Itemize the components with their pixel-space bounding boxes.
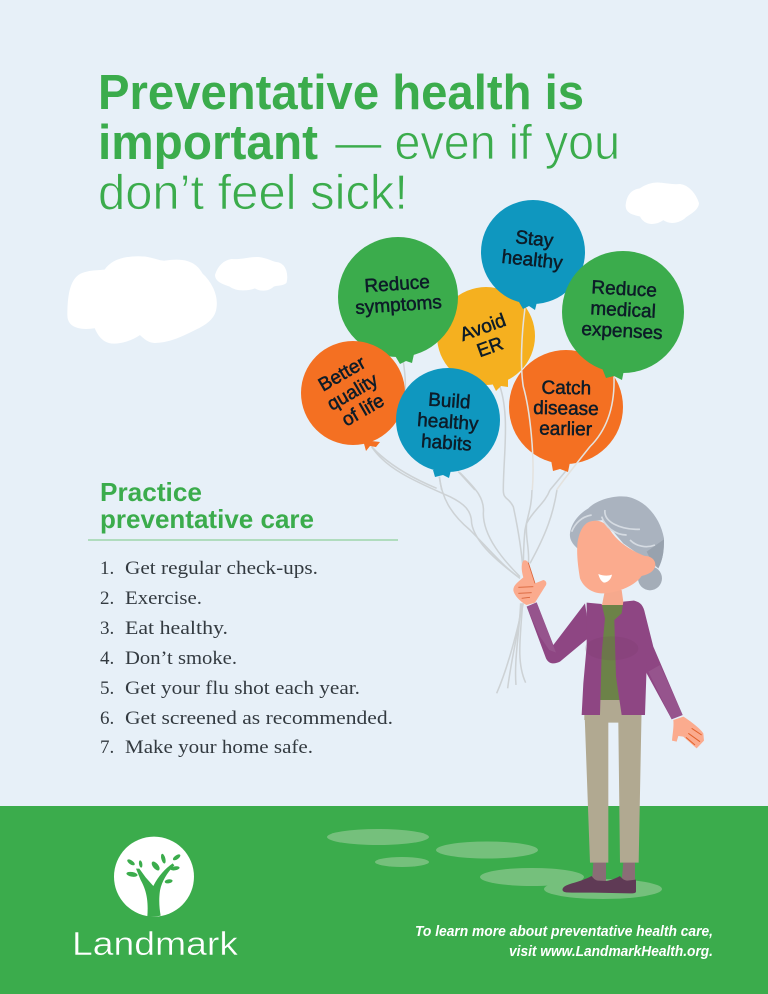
trousers [584, 707, 642, 863]
list of preventative steps: 6. [100, 708, 114, 729]
smile [598, 574, 612, 583]
cloud: large left [69, 258, 215, 342]
cardigan right panel [614, 601, 647, 715]
raised arm [527, 602, 590, 663]
finger lines [518, 563, 535, 598]
balloon: build healthy habits: healthy [417, 410, 480, 435]
balloon: avoid ER: ER [474, 333, 506, 362]
hair bun [638, 566, 662, 590]
socks [592, 862, 635, 882]
hair shade [647, 539, 664, 568]
cardigan left panel [582, 603, 605, 715]
balloon: catch disease earlier: earlier [539, 419, 593, 440]
balloon: reduce symptoms: Reduce [364, 272, 431, 297]
title: important [98, 116, 318, 170]
balloon: better quality of life: Better [315, 352, 370, 396]
balloon: reduce medical expenses: expenses [581, 319, 663, 344]
list of preventative steps: Exercise. [125, 588, 202, 609]
hair highlights [572, 510, 655, 547]
tree emblem [114, 837, 194, 917]
waist shadow [585, 636, 638, 660]
hair [570, 496, 664, 568]
footer note: To learn more about preventative health care, [415, 924, 713, 940]
list of preventative steps: 1. [100, 558, 114, 579]
list of preventative steps: 7. [100, 737, 114, 758]
balloon: stay healthy [481, 200, 585, 310]
balloon: reduce symptoms: symptoms [355, 292, 443, 319]
title: Preventative health is [98, 66, 584, 120]
balloon: build healthy habits: Build [427, 390, 471, 413]
balloon: better quality of life [301, 341, 405, 451]
balloon: build healthy habits [396, 368, 500, 478]
ground [0, 806, 768, 994]
lowered hand [672, 717, 704, 748]
list of preventative steps [100, 558, 393, 758]
balloon: avoid ER: Avoid [457, 310, 509, 346]
list of preventative steps: 5. [100, 678, 114, 699]
shoes [562, 876, 636, 893]
subheading: practice preventative care [100, 477, 314, 534]
illustration: woman holding balloons [513, 496, 704, 893]
list of preventative steps: 4. [100, 648, 114, 669]
waist of trousers [584, 700, 623, 720]
footer note [415, 924, 713, 960]
list of preventative steps: Eat healthy. [125, 618, 228, 639]
list of preventative steps: 3. [100, 618, 114, 639]
title: don’t feel sick! [98, 166, 408, 220]
balloon: reduce medical expenses [562, 251, 684, 380]
balloon: reduce medical expenses: medical [590, 298, 656, 323]
balloon strings: front [521, 308, 614, 490]
hanging arm [633, 601, 683, 719]
arm highlight [648, 665, 683, 719]
title [98, 66, 620, 220]
subheading: practice preventative care: preventative care [100, 504, 314, 534]
arm highlight [527, 602, 556, 653]
list of preventative steps: Get your flu shot each year. [125, 678, 360, 699]
balloon: stay healthy: healthy [501, 247, 564, 274]
title: — even if you [335, 116, 620, 170]
balloon: better quality of life: of life [338, 390, 388, 431]
shirt [599, 605, 624, 702]
footer note: visit www.LandmarkHealth.org. [509, 944, 713, 960]
balloon: build healthy habits: habits [420, 431, 472, 456]
balloon: reduce symptoms [338, 237, 458, 364]
balloon: catch disease earlier: Catch [541, 378, 591, 399]
balloon: stay healthy: Stay [514, 227, 555, 252]
balloon: catch disease earlier [509, 350, 623, 472]
logo wordmark: Landmark [72, 925, 239, 962]
neck [602, 590, 624, 607]
list of preventative steps: 2. [100, 588, 114, 609]
balloon: catch disease earlier: disease [533, 398, 599, 420]
finger lines [686, 728, 702, 745]
face [577, 521, 655, 593]
list of preventative steps: Make your home safe. [125, 737, 313, 758]
upper body [513, 496, 683, 720]
balloon: avoid ER [437, 287, 535, 391]
holding hand [513, 560, 546, 605]
cloud: small centre [216, 258, 286, 290]
balloon strings: rear [372, 362, 567, 693]
cloud: small right [627, 183, 698, 223]
balloon: reduce medical expenses: Reduce [591, 277, 657, 302]
subheading: practice preventative care: Practice [100, 477, 202, 507]
list of preventative steps: Get screened as recommended. [125, 708, 393, 729]
lower body [562, 707, 642, 893]
list of preventative steps: Get regular check-ups. [125, 558, 318, 579]
logo: Landmark [72, 837, 239, 962]
balloon: better quality of life: quality [324, 369, 382, 415]
list of preventative steps: Don’t smoke. [125, 648, 237, 669]
